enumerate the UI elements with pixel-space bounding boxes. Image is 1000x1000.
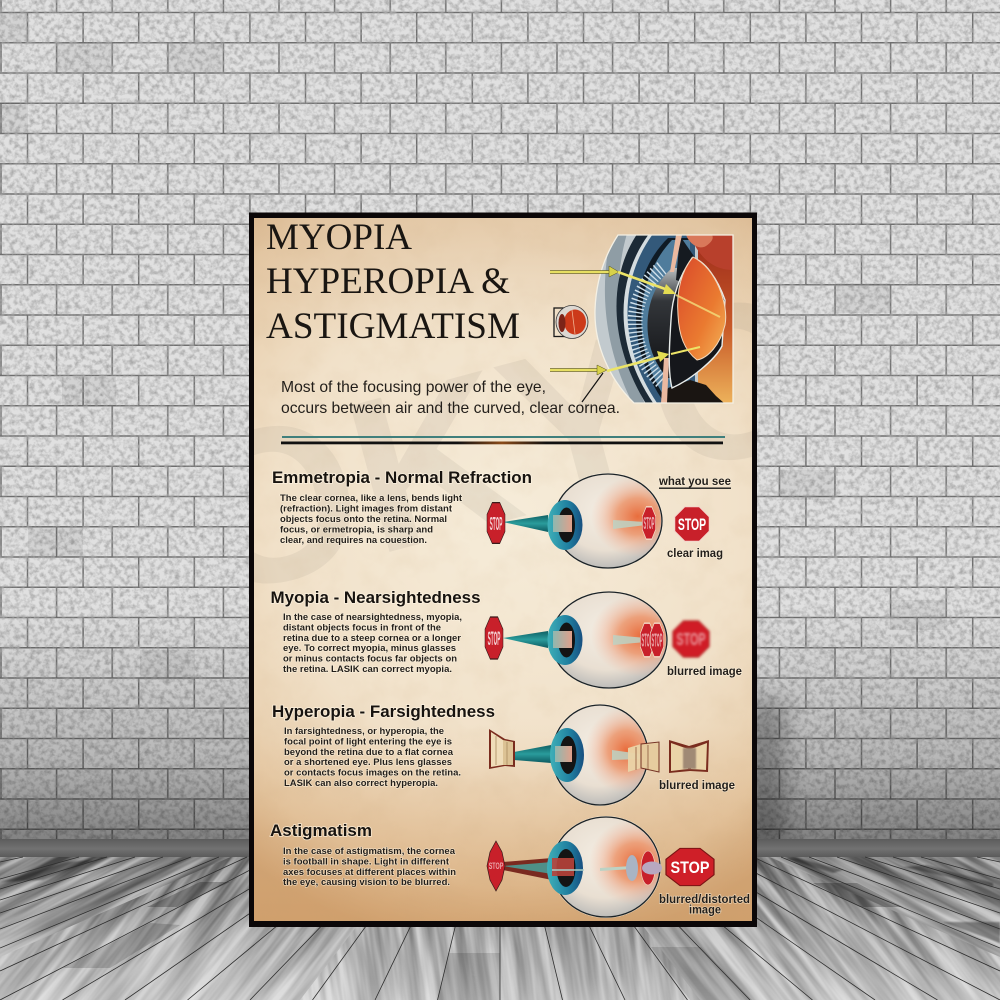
body text: beyond the retina due to a flat cornea (284, 747, 454, 758)
icon: stop sign object (487, 503, 505, 543)
what you see label: what you see (658, 476, 731, 488)
body text: axes focuses at different places within (283, 867, 456, 878)
body text: The clear cornea, like a lens, bends light (280, 493, 463, 504)
icon: distorted stop sign (666, 848, 714, 886)
body text: In the case of nearsightedness, myopia, (283, 612, 462, 623)
body text (283, 846, 456, 888)
heading: Emmetropia - Normal Refraction (272, 468, 532, 487)
result label: blurred image (667, 666, 742, 678)
section: emmetropia (272, 468, 731, 569)
icon: distorted stop sign: STOP (671, 859, 710, 877)
title: HYPEROPIA & (266, 261, 510, 302)
body text (284, 726, 461, 789)
pink tissue band (670, 235, 682, 272)
body text: (refraction). Light images from distant (280, 504, 453, 514)
icon: distorted stop sign object: STOP (489, 861, 503, 871)
icon: stop sign object (485, 617, 503, 659)
section: hyperopia (272, 702, 735, 806)
icon: small eye locator (554, 306, 588, 338)
result label: clear imag (667, 548, 723, 560)
icon: blurred stop sign: STOP (676, 629, 706, 649)
intro text: occurs between air and the curved, clear cornea. (281, 400, 620, 417)
eye diagram: STOP (651, 629, 663, 650)
icon: clear stop sign (675, 507, 709, 541)
section: myopia (270, 588, 742, 689)
title: MYOPIA (266, 217, 412, 258)
icon: book object (489, 729, 515, 769)
arrow: cornea pointer (582, 373, 603, 402)
eye diagram: STOP (643, 513, 655, 533)
background: baseboard (0, 839, 1000, 857)
body text (283, 612, 462, 675)
icon: distorted stop sign object (487, 841, 505, 891)
result label: blurred image (659, 780, 735, 792)
body text: is football in shape. Light in different (283, 856, 450, 868)
icon: blurred book (669, 740, 709, 773)
eye diagram (514, 704, 659, 806)
intro text: Most of the focusing power of the eye, (281, 379, 546, 396)
arrow: lower light ray (550, 347, 700, 375)
section: astigmatism (270, 816, 750, 918)
body text: focus, or ermetropia, is sharp and (280, 524, 433, 536)
iris fibres (635, 268, 662, 382)
body text: or contacts focus images on the retina. (284, 768, 461, 778)
eye diagram (503, 816, 662, 918)
body text (280, 493, 463, 546)
body text: or a shortened eye. Plus lens glasses (284, 757, 452, 768)
intro text (281, 379, 620, 417)
title: ASTIGMATISM (266, 306, 520, 347)
eye diagram (503, 473, 663, 569)
result label (659, 894, 750, 916)
result label: image (689, 904, 721, 916)
poster frame (249, 212, 757, 927)
result label: blurred/distorted (659, 894, 750, 906)
body text: clear, and requires na couestion. (280, 535, 427, 546)
body text: eye. To correct myopia, minus glasses (283, 643, 456, 654)
body text: distant objects focus in front of the (283, 622, 441, 634)
body text: the eye, causing vision to be blurred. (283, 877, 450, 888)
heading: Hyperopia - Farsightedness (272, 702, 495, 721)
eye diagram: STOP (641, 629, 653, 650)
background: wood floor (0, 857, 1000, 1000)
heading: Astigmatism (270, 821, 372, 840)
body text: In farsightedness, or hyperopia, the (284, 726, 444, 737)
icon: retina book (628, 742, 659, 772)
icon: stop sign object: STOP (490, 514, 502, 535)
icon: blurred stop sign (673, 621, 709, 657)
illustration: eye cross-section (550, 230, 740, 410)
arrow: upper light ray (550, 266, 720, 317)
body text: the retina. LASIK can correct myopia. (283, 664, 452, 675)
eye diagram (503, 591, 668, 689)
body text: retina due to a steep cornea or a longer (283, 633, 461, 644)
frame shadow on wall (745, 700, 785, 850)
watermark: OKYO (158, 240, 848, 645)
icon: stop sign object: STOP (488, 629, 500, 650)
title (266, 217, 520, 347)
body text: focal point of light entering the eye is (284, 736, 452, 748)
body text: or minus contacts focus far objects on (283, 654, 457, 664)
divider rules (281, 436, 725, 444)
icon: clear stop sign: STOP (678, 515, 706, 534)
body text: LASIK can also correct hyperopia. (284, 778, 438, 789)
body text: In the case of astigmatism, the cornea (283, 846, 456, 857)
body text: objects focus onto the retina. Normal (280, 514, 447, 525)
heading: Myopia - Nearsightedness (270, 588, 480, 607)
